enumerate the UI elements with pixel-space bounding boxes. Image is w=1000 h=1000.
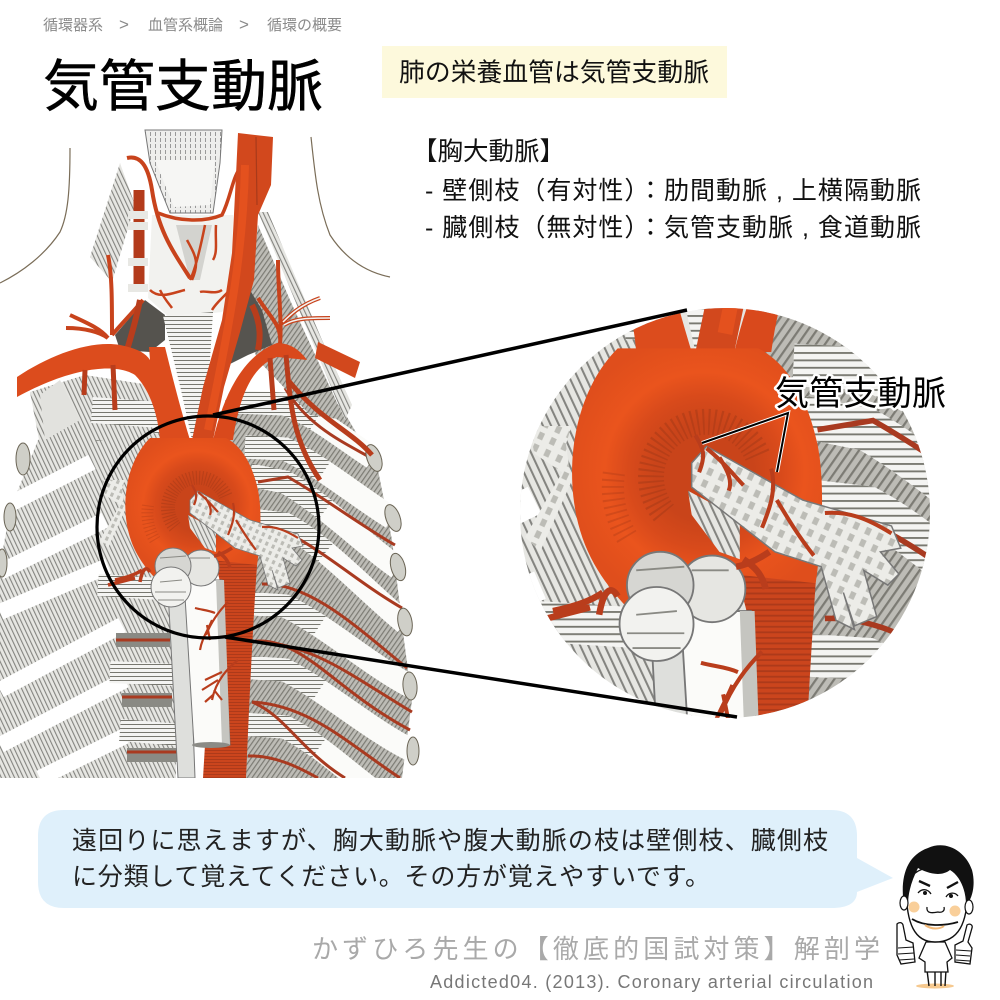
neck outline (0, 137, 390, 283)
anatomical illustration (0, 130, 419, 792)
cheeks (908, 902, 920, 912)
footer citation: Addicted04. (2013). Coronary arterial circulation (430, 972, 873, 992)
ears (900, 896, 908, 910)
zoom connector upper (213, 310, 687, 415)
speech bubble (38, 810, 893, 908)
left bronchus stump (100, 480, 125, 548)
breadcrumb (43, 15, 342, 34)
carotid and subclavian arteries (17, 133, 372, 480)
breadcrumb: 循環の概要 (267, 17, 342, 34)
legs (927, 970, 946, 986)
right ribs (235, 388, 419, 792)
speech bubble: 遠回りに思えますが、胸大動脈や腹大動脈の枝は壁側枝、臓側枝 (72, 827, 828, 855)
eyes and brows (919, 881, 958, 888)
descending aorta (203, 560, 257, 778)
bronchial arteries (108, 485, 298, 702)
neck muscles (90, 163, 352, 420)
breadcrumb: 循環器系 (43, 17, 103, 34)
neck vessels (66, 157, 330, 350)
magnified circular detail (520, 308, 930, 718)
inner arch gray wedge (188, 515, 216, 552)
nose and mouth (927, 907, 944, 913)
right muscle background (225, 400, 412, 778)
breadcrumb: > (239, 15, 249, 34)
lateral chest ribs left upper (30, 375, 160, 445)
yellow subtitle box (382, 46, 727, 98)
aortic arch (125, 438, 260, 578)
speech bubble: に分類して覚えてください。その方が覚えやすいです。 (72, 863, 710, 891)
callout label: 気管支動脈 (775, 375, 946, 413)
face (906, 866, 968, 942)
coat (919, 942, 952, 972)
arch radial ticks (147, 478, 226, 540)
dark mediastinum (115, 300, 165, 352)
classification text: - 臓側枝（無対性）：気管支動脈 , 食道動脈 (425, 214, 921, 242)
left ribs (0, 402, 182, 778)
esophagus (168, 580, 230, 778)
classification text: - 壁側枝（有対性）：肋間動脈 , 上横隔動脈 (425, 177, 921, 205)
heart valve bulbs (151, 548, 219, 607)
icon: doctor character thumbs up (897, 845, 974, 988)
zoom connector lower (225, 637, 737, 717)
footer series title: かずひろ先生の【徹底的国試対策】解剖学 (312, 934, 880, 964)
classification text: 【胸大動脈】 (412, 138, 565, 166)
thumbs (897, 923, 972, 964)
pointer lines to bronchial arteries (702, 413, 788, 472)
breadcrumb: 血管系概論 (148, 16, 223, 34)
bronchus (190, 491, 303, 590)
trachea and larynx (145, 130, 233, 440)
classification text (412, 138, 921, 242)
breadcrumb: > (119, 15, 129, 34)
title: 気管支動脈 (43, 55, 323, 118)
hair (903, 845, 974, 905)
small selection circle (97, 416, 319, 638)
intercostal arteries (248, 388, 412, 778)
yellow subtitle box: 肺の栄養血管は気管支動脈 (399, 58, 709, 87)
